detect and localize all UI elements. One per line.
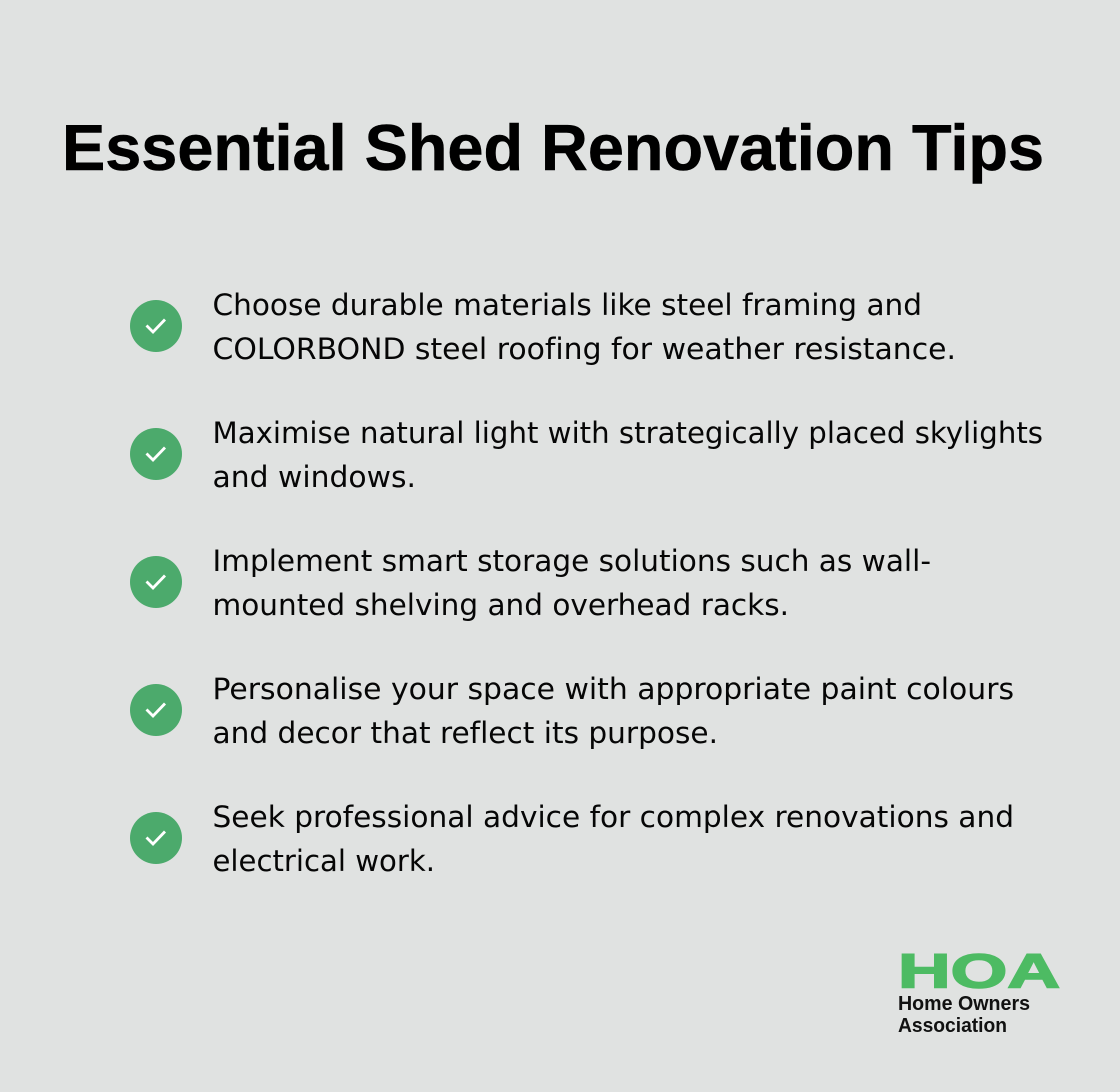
tip 1 text: COLORBOND steel roofing for weather resistance. [212,332,956,366]
tip 5 text: electrical work. [212,844,435,878]
icon: check 2 [130,428,182,480]
tip 1 text [212,288,956,366]
tip 1 [130,288,956,366]
tip 3 text [212,544,931,622]
tip 1 text: Choose durable materials like steel framing and [212,288,922,322]
tip 2 text: Maximise natural light with strategically placed skylights [212,416,1043,450]
tip 3 text: mounted shelving and overhead racks. [212,588,789,622]
tip 4 text [212,672,1014,750]
logo name line 1: Home Owners [898,993,1030,1015]
tip 2 [130,416,1043,494]
tip 2 text: and windows. [212,460,416,494]
tip 4 text: and decor that reflect its purpose. [212,716,718,750]
icon: check 1 [130,300,182,352]
tip 3 [130,544,931,622]
tip 4 [130,672,1014,750]
icon: check 5 [130,812,182,864]
tip 5 text: Seek professional advice for complex renovations and [212,800,1014,834]
icon: check 4 [130,684,182,736]
logo mark HOA: HOA [898,946,1060,998]
logo: Home Owners Association [898,946,1060,1037]
icon: check 3 [130,556,182,608]
tip 5 [130,800,1014,878]
tip 4 text: Personalise your space with appropriate paint colours [212,672,1014,706]
tips list [130,288,1043,878]
tip 5 text [212,800,1014,878]
tip 3 text: Implement smart storage solutions such as wall- [212,544,931,578]
tip 2 text [212,416,1043,494]
logo name line 2: Association [898,1015,1007,1037]
title: Essential Shed Renovation Tips [62,111,1044,184]
